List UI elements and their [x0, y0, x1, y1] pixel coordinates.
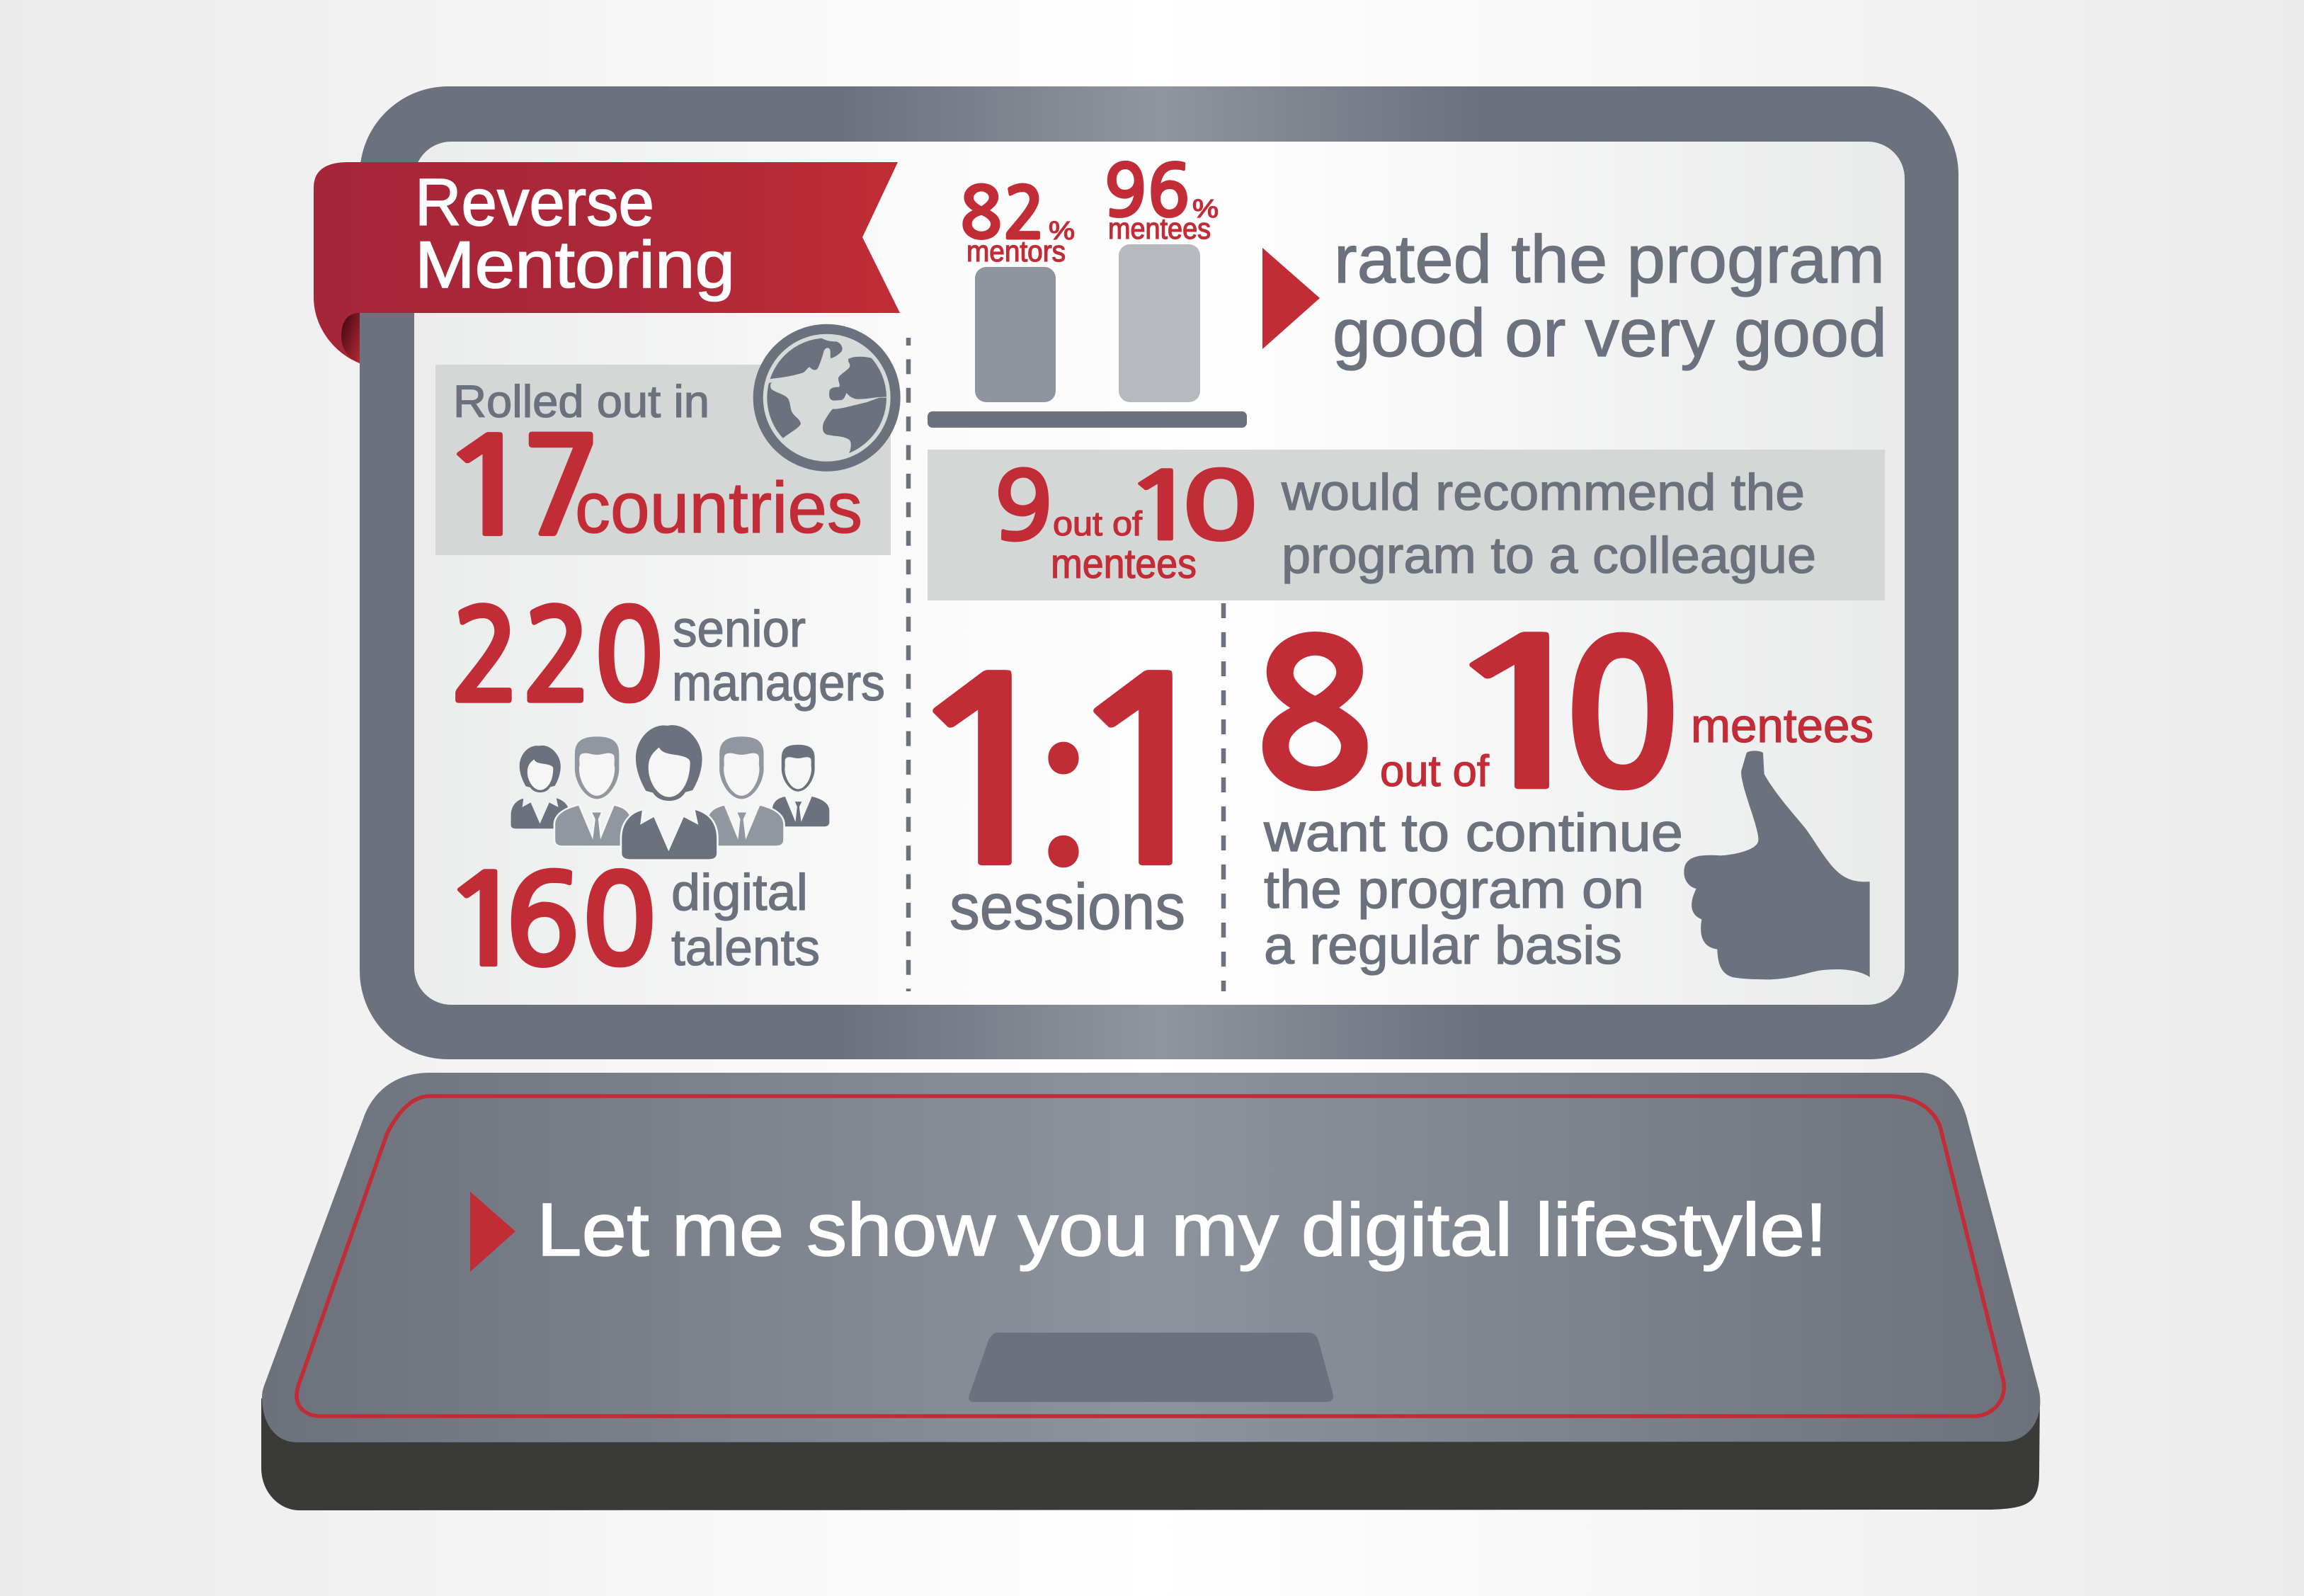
stat: 160 digital talents: talents [671, 920, 820, 976]
stat: 1:1 sessions: 1 [892, 649, 1083, 904]
stat: 160 digital talents: digital [671, 865, 808, 921]
chart baseline [928, 411, 1247, 428]
ribbon fold shadow [341, 313, 360, 363]
text: want to continue [1263, 803, 1683, 976]
text: rated the program [1333, 222, 1887, 371]
person: center woman [622, 725, 717, 859]
tagline: Let me show you my digital lifestyle! [537, 1188, 1827, 1272]
laptop base [261, 1073, 2040, 1510]
red keyboard outline [297, 1096, 2004, 1416]
bar: mentors 82%: mentors [966, 234, 1066, 268]
arrow icon [470, 1192, 515, 1272]
text: want to continue: the program on [1264, 860, 1644, 920]
stat: 220 senior managers: managers [672, 655, 885, 712]
title ribbon [314, 162, 900, 363]
number: 10 [1121, 460, 1260, 554]
number: 10: 1 [1121, 460, 1204, 554]
stat: 8 out of 10: 8 [1254, 620, 1374, 817]
dashed divider left [906, 338, 911, 991]
person: man right [707, 736, 783, 845]
person: man left [555, 736, 632, 845]
laptop screen frame [360, 86, 1958, 1059]
text: rated the program: good or very good [1333, 295, 1887, 371]
text: would recommend: would recommend the [1281, 464, 1805, 521]
stat: 8 out of 10: out of [1380, 747, 1490, 796]
stat: 160 digital talents: 1 [438, 859, 532, 985]
number: 17: 1 [434, 421, 543, 556]
touchpad [969, 1333, 1333, 1402]
stat: 1:1 sessions [892, 597, 1244, 943]
stat: 8 out of 10: 1 [1430, 615, 1620, 819]
stat: 8 out of 10: mentees [1691, 699, 1874, 753]
bar: mentors 82%: % [1049, 216, 1075, 245]
label: out of: out of [1053, 506, 1143, 543]
label: rolled out in: Rolled out in [453, 376, 709, 427]
number: 9: 9 [993, 460, 1054, 554]
stat: 8 out of 10 [1254, 615, 1874, 976]
number: 10: 0 [1180, 460, 1260, 554]
bar: mentees 96%: 96 [1104, 156, 1190, 228]
label: mentees: mentees [1051, 541, 1197, 587]
title: Reverse [415, 165, 654, 239]
base top surface [262, 1073, 2040, 1442]
arrow [1262, 248, 1320, 349]
bar chart: program rating [928, 156, 1247, 428]
stat: 1:1 sessions: sessions [949, 871, 1185, 943]
bar: mentors 82%: 82 [959, 179, 1046, 250]
label: countries: countries [575, 467, 862, 548]
stat: 220 senior managers: 220 [450, 595, 665, 721]
stat: 160 digital talents [438, 859, 820, 985]
bar: mentees 96%: mentees [1108, 212, 1211, 245]
stat: 1:1 sessions: 1 [1053, 649, 1244, 904]
icon: group of people [511, 725, 829, 859]
panel: 9 out of 10: program to a colleague [1282, 528, 1816, 584]
screen [414, 142, 1905, 1005]
bar: mentors 82% [959, 179, 1075, 402]
text: rated the program: rated the program [1334, 222, 1885, 297]
icon: thumbs up [1684, 751, 1870, 979]
text: want to continue: a regular basis [1264, 916, 1622, 976]
stat: 8 out of 10: 0 [1563, 620, 1681, 817]
stat: 1:1 sessions: : [1032, 597, 1095, 932]
bar: mentees 96% [1104, 156, 1219, 402]
text: want to continue: want to continue [1263, 803, 1683, 863]
panel: 9 out of 10 [928, 450, 1885, 600]
title [415, 165, 735, 302]
number: 17: 7 [521, 422, 602, 555]
person: small woman left [511, 746, 570, 828]
dashed divider right [1221, 603, 1226, 991]
base underside [261, 1398, 2040, 1510]
stat: 220 senior managers: senior [673, 601, 806, 658]
stat: 160 digital talents: 60 [504, 860, 658, 984]
bar: mentees 96%: % [1192, 194, 1219, 223]
number: 17 [434, 421, 602, 556]
stat: 220 senior managers [450, 595, 885, 721]
person: small man right [772, 745, 829, 826]
icon: globe [753, 324, 901, 472]
panel: rolled out in 17 countries [434, 324, 901, 556]
title: Mentoring [415, 227, 735, 302]
